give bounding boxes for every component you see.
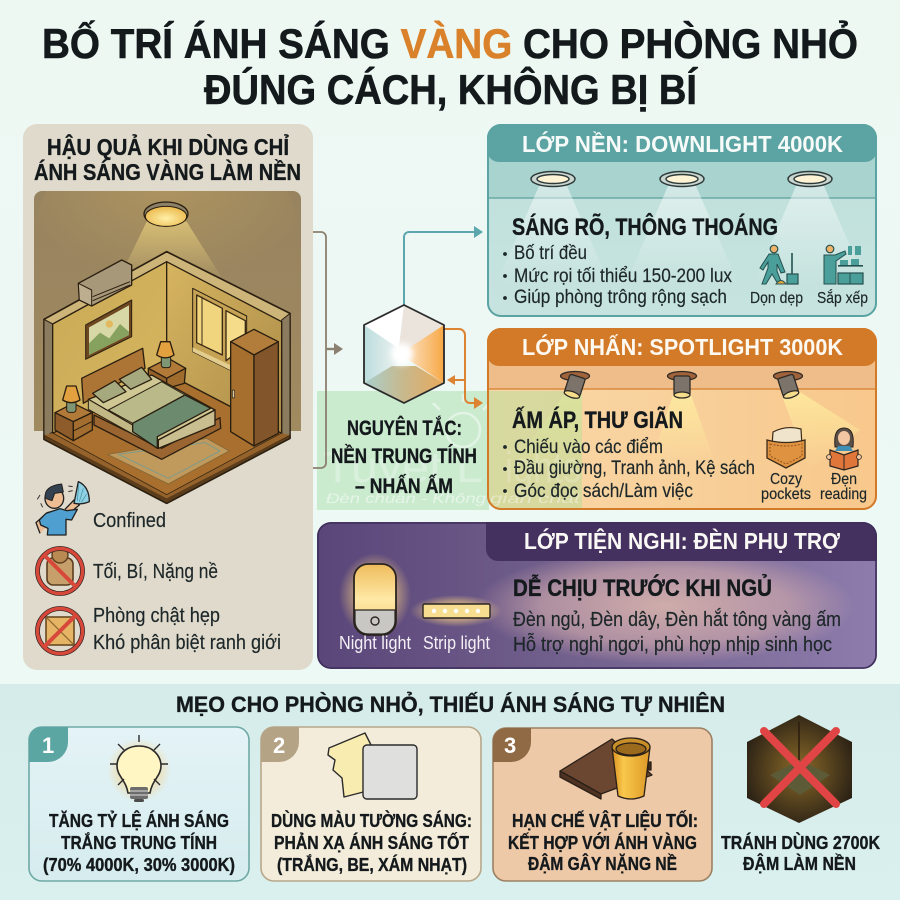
label: cozy pockets: [761, 471, 811, 503]
number badge: [493, 728, 531, 762]
watermark: Đèn chuẩn - Không: [326, 490, 486, 506]
text: dark stuffy heavy: Tối, Bí, Nặng nề: [93, 560, 218, 583]
icon: dark plank and gold cup: [560, 738, 652, 799]
card text: [271, 810, 472, 875]
principle text: – NHẤN ẤM: [355, 475, 453, 498]
icon: no small box room: [38, 608, 82, 654]
bullet list: Bố trí đều: [514, 242, 587, 264]
principle text: NGUYÊN TẮC:: [347, 416, 462, 440]
label: reading: reading: [820, 486, 867, 503]
number badge: 2: [273, 733, 285, 758]
card text: KẾT HỢP VỚI ÁNH VÀNG: [508, 832, 697, 853]
panel: base layer downlight: [487, 124, 877, 317]
panel: accent layer spotlight: [487, 328, 877, 510]
spotlights: [560, 372, 802, 400]
picture: [86, 300, 132, 359]
arrow: orange to accent layer: [444, 329, 483, 409]
header text: LỚP NỀN: DOWNLIGHT 4000K: [522, 130, 843, 157]
bed: [82, 348, 145, 403]
sub-heading: ẤM ÁP, THƯ GIÃN: [512, 406, 683, 434]
downlights: [531, 172, 832, 186]
wardrobe: [231, 329, 278, 355]
number badge: [261, 727, 299, 762]
card text: HẠN CHẾ VẬT LIỆU TỐI:: [512, 810, 698, 831]
icon: organising: [824, 245, 863, 284]
card text: PHẢN XẠ ÁNH SÁNG TỐT: [274, 832, 469, 853]
sub-heading: DỄ CHỊU TRƯỚC KHI NGỦ: [513, 573, 772, 602]
card text: (TRẮNG, BE, XÁM NHẠT): [277, 854, 467, 875]
panel heading: [34, 132, 301, 185]
tips heading: MẸO CHO PHÒNG NHỎ, THIẾU ÁNH SÁNG TỰ NHIÊN: [176, 692, 725, 717]
icon: dark room crossed out: [747, 715, 852, 823]
nightstand back: [148, 358, 186, 378]
watermark: [317, 391, 502, 510]
number badge: [29, 727, 68, 762]
card 2: [261, 727, 481, 881]
avoid text: [721, 832, 880, 874]
label: cleaning: Dọn dẹp: [750, 290, 803, 307]
icon: hot person with fan: [36, 482, 89, 535]
card text: DÙNG MÀU TƯỜNG SÁNG:: [271, 810, 472, 831]
bullet list: Chiếu vào các điểm: [514, 436, 663, 458]
icon: cozy pocket: [767, 428, 805, 468]
label: organising: Sắp xếp: [817, 288, 868, 307]
card text: ĐẬM GÂY NẶNG NỀ: [528, 853, 677, 874]
panel: comfort layer: [317, 522, 877, 669]
window: [193, 288, 247, 370]
avoid text: TRÁNH DÙNG 2700K: [721, 832, 880, 853]
principle text: NỀN TRUNG TÍNH: [331, 445, 477, 468]
sub-heading: SÁNG RÕ, THÔNG THOÁNG: [512, 213, 778, 241]
panel: accent layer spotlight: gian chất: [490, 490, 582, 506]
card text: TĂNG TỶ LỆ ÁNH SÁNG: [49, 810, 229, 831]
avoid text: ĐẬM LÀM NỀN: [743, 853, 856, 874]
icon: principle hexagon: [364, 305, 444, 403]
labels: night and strip light: [339, 632, 490, 653]
header text: LỚP NHẤN: SPOTLIGHT 3000K: [522, 333, 843, 360]
card text: [43, 810, 235, 875]
text: narrow room: Phòng chật hẹp: [93, 604, 220, 627]
text: narrow room: Khó phân biệt ranh giới: [93, 631, 281, 654]
labels: night and strip light: Night light: [339, 632, 411, 653]
label: reading: Đẹn: [831, 471, 857, 488]
card text: TRẮNG TRUNG TÍNH: [61, 832, 217, 853]
text: narrow room: [93, 604, 281, 654]
principle text: [331, 416, 477, 498]
card 3: [493, 728, 712, 881]
card text: (70% 4000K, 30% 3000K): [43, 855, 235, 875]
icon: strip light: [410, 595, 502, 627]
card 1: [29, 727, 249, 881]
bullet list: Giúp phòng trông rộng sạch: [514, 286, 727, 308]
labels: night and strip light: Strip light: [423, 632, 490, 653]
icon: cleaning: [760, 245, 798, 284]
bullet list: [503, 436, 755, 502]
nightstand front: [55, 403, 92, 422]
label: cozy pockets: pockets: [761, 486, 811, 503]
watermark: Tuyet L: [323, 443, 483, 492]
panel: accent layer spotlight: ights: [505, 443, 581, 492]
text: confined: Confined: [93, 509, 166, 532]
description: [513, 608, 841, 656]
number badge: 1: [42, 733, 54, 758]
description: Hỗ trợ nghỉ ngơi, phù hợp nhịp sinh học: [513, 633, 832, 656]
bullet list: Góc đọc sách/Làm việc: [514, 480, 693, 502]
icon: colour swatches: [328, 733, 417, 799]
icon: reading person: [827, 428, 861, 470]
label: reading: [820, 471, 867, 503]
arrow: teal to base layer: [404, 226, 483, 305]
bullet list: Mức rọi tối thiểu 150-200 lux: [514, 265, 732, 287]
header text: LỚP TIỆN NGHI: ĐÈN PHỤ TRỢ: [524, 527, 840, 554]
room illustration: [34, 191, 301, 504]
panel heading: ÁNH SÁNG VÀNG LÀM NỀN: [34, 158, 301, 185]
ceiling lamp: [144, 202, 188, 226]
title: BỐ TRÍ ÁNH SÁNG VÀNG CHO PHÒNG NHỎ: [42, 19, 858, 67]
bullet list: Đầu giường, Tranh ảnh, Kệ sách: [514, 457, 755, 479]
icon: no heavy bag: [38, 547, 82, 594]
panel heading: HẬU QUẢ KHI DÙNG CHỈ: [47, 132, 290, 160]
arrow: bracket to principle: [313, 232, 343, 468]
icon: bulb: [107, 735, 171, 802]
card text: [508, 810, 698, 874]
bullet list: [503, 242, 732, 308]
label: cozy pockets: Cozy: [770, 471, 802, 488]
panel: consequences: [23, 124, 313, 670]
title: [42, 19, 858, 113]
number badge: 3: [504, 733, 516, 758]
icon: night light: [339, 553, 411, 637]
title: ĐÚNG CÁCH, KHÔNG BỊ BÍ: [204, 65, 698, 113]
description: Đèn ngủ, Đèn dây, Đèn hắt tông vàng ấm: [513, 608, 841, 631]
ac: [78, 260, 132, 306]
